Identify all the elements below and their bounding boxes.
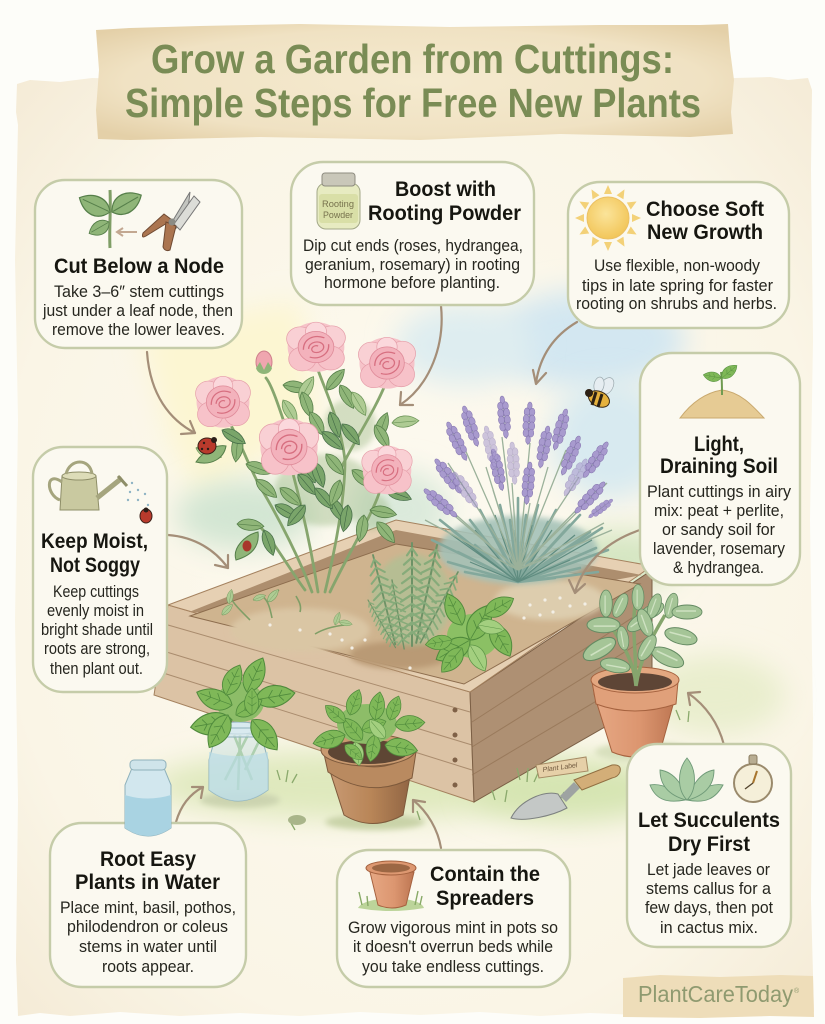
body text: Let jade leaves or bbox=[647, 860, 770, 879]
body text: stems in water until bbox=[79, 937, 217, 956]
soil bbox=[190, 544, 640, 684]
heading: Draining Soil bbox=[660, 455, 778, 478]
plant label tag: Plant Label bbox=[542, 762, 578, 774]
heading: Not Soggy bbox=[50, 554, 140, 577]
ladybug on leaf bbox=[196, 437, 226, 463]
icon: small pot bbox=[358, 861, 424, 911]
perlite specks bbox=[268, 596, 587, 670]
icon: cutting and pruners bbox=[75, 186, 200, 251]
body text: Dip cut ends (roses, hydrangea, bbox=[303, 236, 523, 255]
rose leaves bbox=[282, 379, 311, 395]
body text: mix: peat + perlite, bbox=[654, 501, 784, 520]
body text: Place mint, basil, pothos, bbox=[60, 898, 236, 917]
icon: sun bbox=[575, 185, 641, 251]
heading bbox=[660, 433, 778, 478]
rosemary bbox=[363, 543, 466, 651]
body text: remove the lower leaves. bbox=[52, 320, 225, 339]
body text bbox=[576, 256, 777, 313]
body text bbox=[303, 236, 523, 292]
body text: or sandy soil for bbox=[662, 520, 775, 539]
leaf with ladybug bbox=[235, 532, 258, 560]
plant label tag bbox=[536, 757, 588, 778]
heading bbox=[638, 809, 780, 856]
jar with cuttings in water bbox=[189, 654, 297, 808]
bee bbox=[585, 375, 617, 410]
heading: Cut Below a Node bbox=[54, 255, 224, 278]
body text bbox=[647, 482, 792, 577]
heading bbox=[75, 848, 220, 894]
body text: then plant out. bbox=[50, 659, 143, 678]
arrow: keep moist to bed bbox=[168, 535, 228, 568]
title text: Simple Steps for Free New Plants bbox=[125, 80, 701, 126]
body text: & hydrangea. bbox=[673, 558, 764, 577]
body text bbox=[60, 898, 236, 976]
watercolor background washes bbox=[140, 290, 785, 822]
lavender spikes bbox=[458, 404, 483, 449]
body text: you take endless cuttings. bbox=[362, 957, 544, 976]
lavender plant bbox=[420, 395, 615, 584]
rose bush bbox=[194, 322, 419, 592]
panel: let succulents dry bbox=[627, 744, 791, 947]
icon: sprout on sand bbox=[680, 361, 764, 418]
heading: Plants in Water bbox=[75, 871, 220, 894]
arrow: contain card to mint pot bbox=[413, 800, 441, 848]
body text bbox=[42, 282, 233, 339]
grass tufts bbox=[277, 710, 689, 830]
seedlings bbox=[220, 587, 353, 634]
body text: tips in late spring for faster bbox=[582, 276, 773, 295]
body text: few days, then pot bbox=[645, 898, 773, 917]
heading: Light, bbox=[694, 433, 744, 456]
arrow: soft growth to lavender bbox=[533, 322, 577, 384]
rose blooms bbox=[287, 322, 345, 372]
panel: soft new growth bbox=[568, 182, 789, 328]
bed right face bbox=[470, 570, 652, 802]
heading: Root Easy bbox=[100, 848, 196, 871]
panel: rooting powder bbox=[291, 162, 534, 305]
arrow: rooting powder to rose bbox=[400, 306, 442, 405]
bolts bbox=[452, 708, 458, 788]
basil bbox=[424, 590, 519, 678]
heading bbox=[41, 530, 148, 577]
icon: powder jar: Rooting bbox=[322, 199, 354, 209]
rose foliage mass bbox=[275, 399, 390, 530]
body text: stems callus for a bbox=[646, 879, 772, 898]
body text: bright shade until bbox=[41, 620, 153, 639]
panel: contain the spreaders bbox=[337, 850, 570, 987]
heading: Spreaders bbox=[436, 887, 534, 910]
heading: Rooting Powder bbox=[368, 202, 521, 225]
heading: Keep Moist, bbox=[41, 530, 148, 553]
heading bbox=[646, 198, 764, 244]
bed back walls bbox=[168, 520, 652, 692]
potted mint bbox=[311, 687, 426, 830]
body text: geranium, rosemary) in rooting bbox=[305, 255, 520, 274]
raised garden bed bbox=[154, 520, 652, 802]
icon: stopwatch bbox=[734, 755, 772, 802]
heading: New Growth bbox=[647, 221, 763, 244]
body text: in cactus mix. bbox=[660, 918, 758, 937]
pot of jade plant bbox=[580, 584, 702, 762]
arrow: water card to jar bbox=[176, 787, 203, 822]
logo badge: PlantCareToday bbox=[638, 981, 793, 1007]
body text: hormone before planting. bbox=[324, 273, 500, 292]
heading: Let Succulents bbox=[638, 809, 780, 832]
rose bud bbox=[256, 351, 272, 374]
lavender stems bbox=[425, 437, 612, 570]
icon: watering can bbox=[49, 462, 149, 510]
heading: Boost with bbox=[395, 178, 496, 201]
panel: cut below a node bbox=[35, 180, 242, 348]
icon: succulent bbox=[650, 758, 723, 801]
title text bbox=[125, 36, 701, 126]
lavender foliage bbox=[438, 516, 598, 584]
body text bbox=[645, 860, 773, 937]
rose stems bbox=[228, 370, 385, 592]
arrow: node card to rose bbox=[147, 352, 195, 434]
icon: powder jar bbox=[317, 173, 360, 229]
heading bbox=[368, 178, 521, 225]
body text: Grow vigorous mint in pots so bbox=[348, 918, 558, 937]
arrow: succulents card to jade bbox=[688, 692, 724, 745]
body text: Keep cuttings bbox=[53, 582, 139, 601]
heading: Choose Soft bbox=[646, 198, 764, 221]
heading bbox=[430, 863, 540, 910]
body text: Plant cuttings in airy bbox=[647, 482, 792, 501]
body text: it doesn't overrun beds while bbox=[353, 937, 553, 956]
title banner bbox=[96, 24, 734, 140]
logo badge: ® bbox=[794, 987, 800, 995]
jar cutting leaves bbox=[216, 682, 264, 722]
logo badge bbox=[623, 975, 814, 1018]
body text: roots are strong, bbox=[44, 639, 150, 658]
heading: Dry First bbox=[668, 833, 750, 856]
mint leaves bbox=[337, 704, 397, 744]
body text: Use flexible, non-woody bbox=[594, 256, 761, 275]
body text: just under a leaf node, then bbox=[42, 301, 233, 320]
icon: water jar bbox=[125, 760, 171, 836]
panel: keep moist bbox=[33, 447, 167, 692]
heading: Contain the bbox=[430, 863, 540, 886]
body text bbox=[41, 582, 153, 678]
body text: lavender, rosemary bbox=[653, 539, 786, 558]
title text: Grow a Garden from Cuttings: bbox=[151, 36, 674, 82]
body text bbox=[348, 918, 558, 976]
ladybug bbox=[140, 508, 152, 523]
body text: evenly moist in bbox=[47, 601, 144, 620]
arrow: soil card to soil bbox=[569, 530, 640, 593]
bed left front face bbox=[154, 605, 474, 802]
body text: philodendron or coleus bbox=[67, 917, 228, 936]
body text: Take 3–6″ stem cuttings bbox=[54, 282, 224, 301]
panel: light draining soil bbox=[640, 353, 800, 585]
small pebble bbox=[288, 815, 306, 825]
garden trowel bbox=[511, 765, 620, 819]
body text: roots appear. bbox=[102, 957, 194, 976]
jade stems and leaves bbox=[610, 605, 665, 686]
body text: rooting on shrubs and herbs. bbox=[576, 294, 777, 313]
panel: root in water bbox=[50, 760, 246, 987]
icon: powder jar: Powder bbox=[323, 210, 353, 220]
